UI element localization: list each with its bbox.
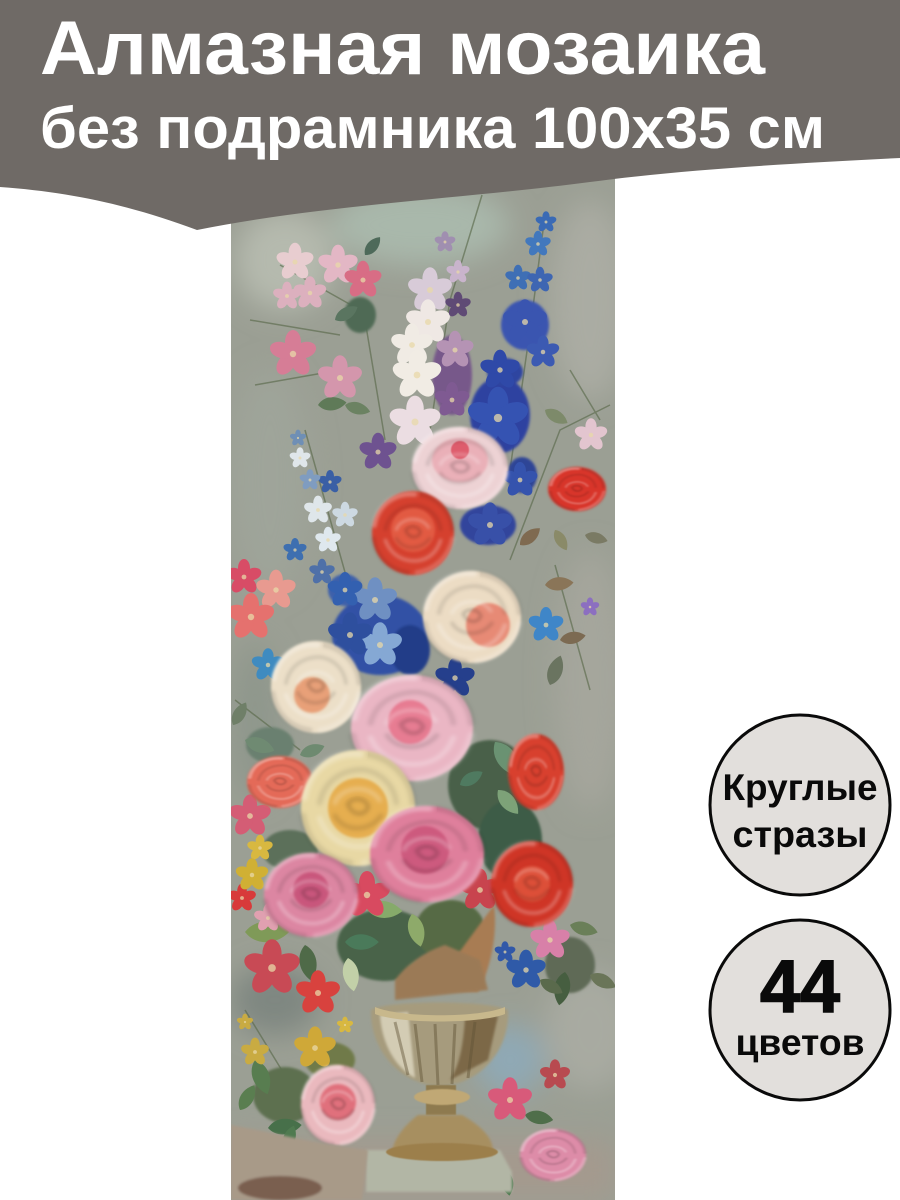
vase (366, 905, 512, 1192)
badge: round rhinestones: Круглые (722, 767, 878, 808)
rose: red lower (491, 841, 573, 927)
rose: fallen pink (520, 1129, 586, 1181)
scattered leaves (228, 234, 619, 1197)
subtitle: без подрамника 100х35 см (40, 96, 825, 161)
rose: red top (372, 491, 454, 575)
rose: pink bottom (301, 1065, 375, 1145)
white and lilac delphinium (358, 231, 475, 471)
badge: round rhinestones: стразы (732, 814, 868, 855)
rose: red small right (548, 467, 606, 511)
rose: pale pink top (412, 427, 508, 509)
rose: cream (423, 571, 521, 663)
rose: pink lower left (264, 853, 358, 937)
small pink blossoms (225, 243, 609, 1123)
panel: flower painting (225, 170, 635, 1200)
title (40, 6, 825, 161)
rose: coral (247, 756, 313, 808)
badge: round rhinestones (710, 715, 890, 895)
header banner (0, 0, 900, 230)
roses (247, 427, 606, 1181)
painting background tones (230, 185, 635, 1200)
rose: deep pink center (370, 806, 484, 902)
table (231, 1125, 368, 1200)
rose: cream left (271, 641, 361, 733)
rose: yellow (301, 750, 415, 866)
badge: 44 colours: 44 (760, 945, 840, 1028)
title: Алмазная мозаика (40, 6, 766, 91)
yellow blossoms (234, 835, 354, 1070)
foliage (246, 297, 595, 1123)
blue delphinium (250, 211, 600, 991)
badge: 44 colours: цветов (736, 1022, 864, 1063)
stems (235, 195, 610, 1100)
rose: red right (508, 734, 564, 810)
badge: 44 colours (710, 920, 890, 1100)
rose: big pink middle (351, 675, 473, 781)
